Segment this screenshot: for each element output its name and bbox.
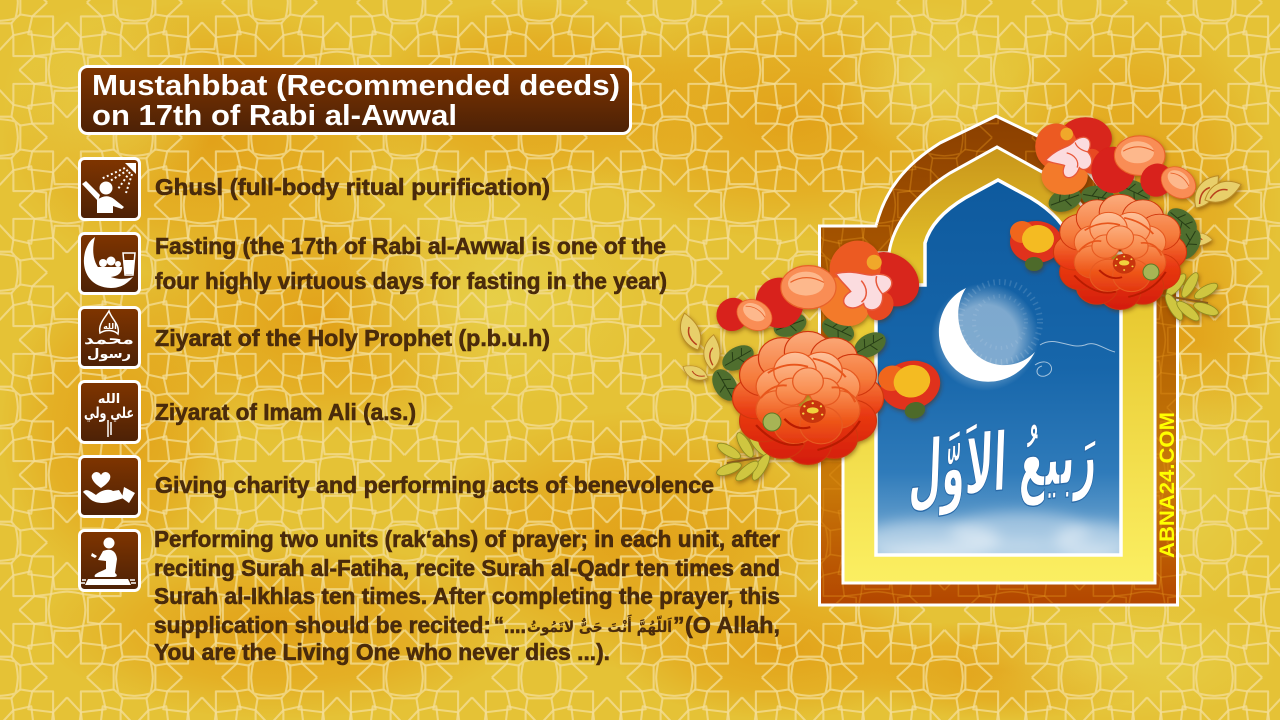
item text: prayer paragraph xyxy=(154,526,780,665)
item text: fasting xyxy=(155,233,667,294)
icon: charity hand xyxy=(80,456,140,516)
item text: prayer paragraph: ” xyxy=(673,612,684,638)
icon: Prophet calligraphy xyxy=(80,308,140,368)
clouds xyxy=(878,504,1120,554)
item text: prayer paragraph: supplication should be recited: xyxy=(154,612,491,638)
icon: crescent with food xyxy=(80,234,140,294)
inner yellow arch xyxy=(843,147,1155,583)
title banner xyxy=(80,66,630,134)
item text: prayer paragraph: reciting Surah al-Fatiha, recite Surah al-Qadr ten times and xyxy=(154,555,780,581)
website label: ABNA24.COM xyxy=(1156,412,1179,558)
item text: prayer paragraph: Performing two units (rak‘ahs) of prayer; in each unit, after xyxy=(154,526,780,552)
flowers: left cluster xyxy=(672,224,948,484)
calligraphy: Rabi al-Awwal: رَبیعُ الاَوَّل xyxy=(907,406,1098,520)
item text: ziyarat ali: Ziyarat of Imam Ali (a.s.) xyxy=(155,399,416,425)
title text: Mustahbbat (Recommended deeds) xyxy=(92,70,620,102)
icon: prayer xyxy=(80,530,140,590)
mihrab frame xyxy=(820,116,1179,605)
item text: prayer paragraph: اَللّهُمَّ أَنْتَ حَىٌّ لاتَمُوتُ xyxy=(527,614,672,636)
flowers: upper right cluster xyxy=(1010,117,1243,324)
sky panel xyxy=(876,180,1121,555)
item text: prayer paragraph: Surah al-Ikhlas ten times. After completing the prayer, this xyxy=(154,583,780,609)
item text: charity: Giving charity and performing acts of benevolence xyxy=(155,472,714,498)
item text: fasting: Fasting (the 17th of Rabi al-Awwal is one of the xyxy=(155,233,666,259)
icon: Imam Ali calligraphy: الله xyxy=(98,392,120,407)
icon: Imam Ali calligraphy xyxy=(80,382,140,442)
item text: ghusl: Ghusl (full-body ritual purification) xyxy=(155,174,550,200)
icon: shower xyxy=(80,158,140,220)
item text: prayer paragraph: “.... xyxy=(494,612,526,638)
icon: Imam Ali calligraphy: علي ولي xyxy=(84,404,134,422)
outer arch xyxy=(820,116,1178,605)
title banner: on 17th of Rabi al-Awwal xyxy=(92,100,457,132)
item text: prayer paragraph: (O Allah, xyxy=(685,612,780,638)
icon: Prophet calligraphy: رسول xyxy=(87,347,131,362)
item text: prayer paragraph: You are the Living One who never dies ...). xyxy=(154,639,610,665)
item text: ziyarat prophet: Ziyarat of the Holy Prophet (p.b.u.h) xyxy=(155,325,550,351)
crescent moon xyxy=(931,282,1115,391)
icon: Prophet calligraphy: محمد xyxy=(84,332,134,348)
item text: fasting: four highly virtuous days for fasting in the year) xyxy=(155,268,667,294)
icon: Prophet calligraphy: الله xyxy=(103,322,117,331)
